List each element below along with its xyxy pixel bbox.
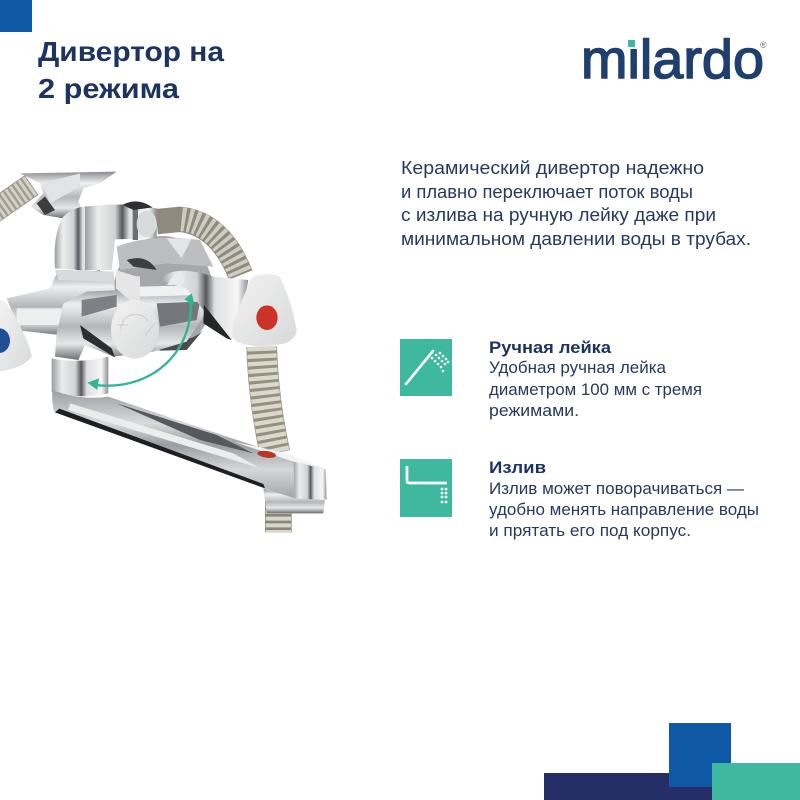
feature: spout text xyxy=(489,458,759,540)
feature: spout text: и прятать его под корпус. xyxy=(489,522,691,540)
description text: и плавно переключает поток воды xyxy=(401,182,693,202)
blue dot xyxy=(0,328,10,353)
central body xyxy=(55,285,207,360)
title: 2 режима xyxy=(38,73,179,104)
title: Дивертор на xyxy=(38,36,224,67)
hand shower connector xyxy=(20,172,117,218)
hose: upper left xyxy=(0,185,32,212)
red spout marker xyxy=(257,450,276,458)
feature: hand shower text: Удобная ручная лейка xyxy=(489,359,667,377)
icon: hand shower xyxy=(400,339,452,396)
red dot xyxy=(256,305,278,330)
feature: spout text: Излив xyxy=(489,458,546,477)
description text: Керамический дивертор надежно xyxy=(401,158,704,178)
left handle xyxy=(0,298,32,372)
left pipe xyxy=(7,270,115,337)
logo: milardo: milardo xyxy=(581,28,764,90)
right handle xyxy=(232,274,297,346)
description text xyxy=(401,158,751,249)
feature: hand shower text: диаметром 100 мм с тремя xyxy=(489,381,702,399)
diverter knob xyxy=(111,270,159,359)
description text: с излива на ручную лейку даже при xyxy=(401,205,716,225)
corner blocks: bottom right xyxy=(544,723,800,800)
feature: hand shower text xyxy=(489,338,702,420)
corner square: top left xyxy=(0,0,32,32)
feature: spout text: Излив может поворачиваться — xyxy=(489,480,745,498)
lower collar xyxy=(52,357,108,396)
diverter arrow xyxy=(87,293,195,390)
feature: hand shower text: Ручная лейка xyxy=(489,338,612,357)
feature: spout text: удобно менять направление воды xyxy=(489,501,759,519)
wall flange xyxy=(113,236,213,351)
logo: milardo: ® xyxy=(760,40,767,50)
diverter head xyxy=(55,201,157,272)
hose: bottom xyxy=(265,501,292,533)
hose: lower right xyxy=(262,347,275,453)
spout aerator xyxy=(263,488,325,513)
description text: минимальном давлении воды в трубах. xyxy=(401,229,751,249)
hose: upper right xyxy=(157,219,241,275)
spout xyxy=(52,390,327,500)
right valve xyxy=(160,271,248,340)
title xyxy=(38,36,224,104)
faucet photo illustration xyxy=(0,172,327,533)
icon: spout xyxy=(400,459,452,517)
feature: hand shower text: режимами. xyxy=(489,402,579,420)
